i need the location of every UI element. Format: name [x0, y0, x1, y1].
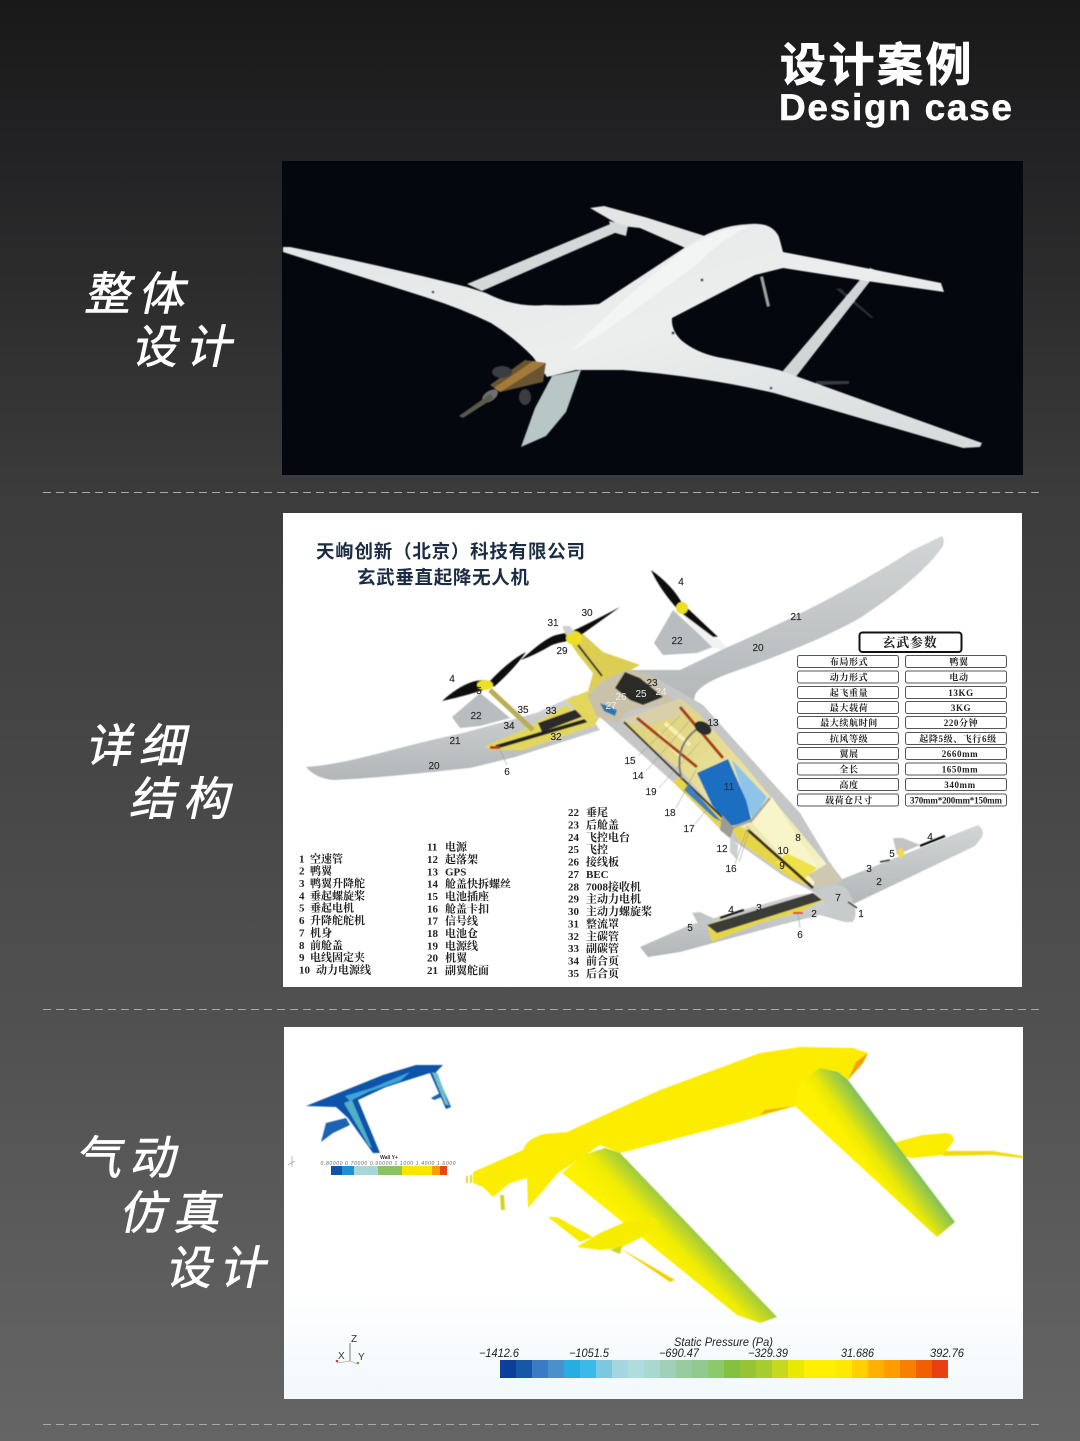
parts legend column 3: 23 — [568, 819, 580, 831]
pressure colour bar — [500, 1360, 948, 1378]
parts legend column 3: 32 — [568, 931, 580, 943]
right canard — [835, 825, 983, 908]
parts legend column 3: 飞控 — [586, 842, 608, 856]
parts legend column 1: 4 — [299, 890, 305, 902]
fuselage — [473, 1047, 868, 1208]
parts legend column 1: 8 — [299, 940, 305, 952]
parts legend column 3: 主动力螺旋桨 — [586, 904, 652, 918]
part number labels: 22 — [671, 636, 683, 647]
part number labels: 21 — [449, 736, 461, 747]
parameter table: 220分钟 — [944, 717, 978, 728]
illustration: cutaway drone — [306, 536, 983, 957]
heading: 整体设计: 设计 — [129, 321, 248, 373]
parameter table: 布局形式 — [830, 656, 868, 667]
parts legend column 2: 15 — [427, 891, 438, 903]
parts legend column 1: 6 — [299, 915, 305, 927]
parts legend column 2: 副翼舵面 — [445, 963, 489, 977]
divider — [43, 1008, 1040, 1010]
parts legend column 2: 11 — [427, 842, 437, 854]
parameter table: 起降5级、飞行6级 — [919, 733, 997, 744]
part number labels — [428, 577, 933, 941]
leader lines — [500, 716, 800, 928]
axes triad: X — [338, 1351, 345, 1362]
parts legend column 1: 3 — [299, 878, 305, 890]
parts legend column 1: 垂起螺旋桨 — [310, 888, 365, 902]
parts legend column 2: 18 — [427, 928, 438, 940]
parts legend column 2: 14 — [427, 879, 438, 891]
rudders — [452, 610, 731, 728]
part number labels: 21 — [790, 612, 802, 623]
colour bar labels: −1051.5 — [569, 1348, 610, 1360]
part number labels: 5 — [889, 849, 895, 860]
colour bar labels — [479, 1337, 965, 1360]
part number labels: 16 — [725, 864, 737, 875]
parameter table: 抗风等级 — [830, 733, 868, 744]
part number labels: 20 — [428, 761, 440, 772]
parts legend column 3: 26 — [568, 856, 580, 868]
heading: 气动仿真设计: 设计 — [163, 1242, 282, 1294]
part number labels: 11 — [724, 782, 735, 793]
company heading — [316, 541, 585, 588]
colour bar labels: 31.686 — [841, 1348, 875, 1360]
parameter table: 载荷仓尺寸 — [825, 794, 873, 806]
part number labels: 4 — [927, 832, 933, 843]
landing gear — [730, 837, 738, 860]
colour bar labels: 392.76 — [930, 1348, 965, 1360]
battery — [684, 759, 770, 838]
part number labels: 4 — [728, 905, 734, 916]
part number labels: 2 — [811, 909, 817, 920]
parts legend column 2: 舱盖卡扣 — [445, 901, 489, 915]
heading: 整体设计: 整体 — [82, 268, 201, 320]
parts legend column 3: 22 — [568, 807, 580, 819]
parts legend column 3: 接线板 — [586, 854, 619, 868]
parts legend column 2: 起落架 — [445, 852, 478, 866]
part number labels: 19 — [645, 787, 657, 798]
parts legend column 2: 电源 — [445, 840, 468, 854]
part number labels: 23 — [646, 678, 658, 689]
parts legend column 1: 9 — [299, 952, 305, 964]
parts legend column 2: 信号线 — [445, 914, 478, 928]
parameter table: 370mm*200mm*150mm — [910, 796, 1002, 806]
illustration: white drone — [283, 206, 982, 448]
parts legend column 1: 电线固定夹 — [310, 950, 365, 964]
part number labels: 20 — [752, 643, 764, 654]
panel: overall design photo — [282, 161, 1023, 475]
part number labels: 14 — [632, 771, 644, 782]
parameter table: 340mm — [944, 780, 976, 790]
part number labels: 2 — [876, 877, 882, 888]
part number labels: 10 — [777, 846, 789, 857]
colour bar labels: −1412.6 — [479, 1348, 520, 1360]
divider — [43, 1424, 1040, 1426]
parts legend column 2: 17 — [427, 916, 438, 928]
parts legend column 2: 20 — [427, 953, 438, 965]
parts legend column 2: 舱盖快拆螺丝 — [445, 877, 511, 891]
parameter table: 1650mm — [942, 764, 978, 774]
battery bay stripes — [657, 723, 690, 757]
parameter table: 高度 — [839, 779, 859, 790]
part number labels: 33 — [545, 706, 557, 717]
part number labels: 8 — [795, 833, 801, 844]
parts legend column 2: 12 — [427, 854, 438, 866]
tail cone — [566, 634, 640, 695]
inset axes — [288, 1156, 295, 1167]
part number labels: 18 — [664, 808, 676, 819]
parts legend column 3: 34 — [568, 956, 580, 968]
wing: right — [795, 1068, 955, 1237]
axes triad — [336, 1334, 365, 1364]
heading: 详细结构 — [83, 720, 246, 825]
part number labels: 3 — [756, 903, 762, 914]
parts legend column 1: 前舱盖 — [310, 938, 343, 952]
part number labels: 35 — [517, 705, 529, 716]
part number labels: 4 — [678, 577, 684, 588]
left boom fin — [548, 1217, 675, 1282]
divider — [43, 492, 1040, 494]
part number labels: 25 — [635, 689, 647, 700]
avionics bay — [587, 670, 677, 723]
panel: detailed structure — [283, 513, 1022, 987]
parameter table: 起飞重量 — [830, 687, 868, 698]
parts legend column 3: 飞控电台 — [586, 830, 631, 844]
parts legend column 1: 10 — [299, 964, 310, 976]
parts legend column 3: 28 — [568, 881, 580, 893]
parts legend column 1: 7 — [299, 927, 305, 939]
heading: 详细结构: 详细 — [83, 720, 202, 772]
parts legend column 3: 整流罩 — [586, 916, 619, 930]
parameter table — [798, 632, 1006, 806]
colour bar labels: −329.39 — [748, 1348, 789, 1360]
parameter table: 最大载荷 — [830, 702, 868, 713]
parts legend column 2 — [427, 840, 511, 977]
parts legend column 1: 升降舵舵机 — [310, 913, 365, 927]
parameter table: 动力形式 — [830, 672, 868, 682]
parts legend column 3: 后合页 — [586, 966, 619, 980]
parts legend column 2: 电池插座 — [445, 889, 490, 903]
axes triad: Y — [358, 1352, 365, 1363]
parts legend column 1 — [299, 851, 371, 976]
parts legend column 2: GPS — [445, 866, 466, 878]
part number labels: 9 — [779, 861, 785, 872]
part number labels: 29 — [556, 646, 568, 657]
main wing — [306, 536, 944, 780]
title: Design case — [779, 87, 1012, 128]
parts legend column 3 — [568, 805, 652, 980]
parts legend column 1: 5 — [299, 903, 305, 915]
parts legend column 1: 2 — [299, 866, 305, 878]
parts legend column 3: 后舱盖 — [586, 817, 619, 831]
parts legend column 3: 35 — [568, 968, 580, 980]
part number labels: 13 — [707, 718, 719, 729]
illustration: pressure contour drone — [466, 1047, 1023, 1323]
parts legend column 2: 13 — [427, 866, 438, 878]
parts legend column 2: 19 — [427, 940, 438, 952]
red elevator servo — [793, 912, 803, 914]
panel: aerodynamic simulation — [284, 1027, 1023, 1399]
parameter table: 3KG — [951, 703, 971, 713]
parts legend column 3: 27 — [568, 869, 580, 881]
propellers — [442, 570, 718, 701]
parameter table: 玄武参数 — [882, 635, 938, 651]
parameter table: 13KG — [948, 688, 974, 698]
title — [779, 39, 1012, 128]
part number labels: 17 — [683, 824, 695, 835]
inset: wall y+ drone — [306, 1065, 451, 1153]
fuselage — [600, 670, 843, 905]
parts legend column 2: 电池仓 — [445, 926, 478, 940]
motors — [477, 602, 688, 690]
parameter table: 最大续航时间 — [820, 717, 878, 728]
heading: 气动仿真设计: 气动 — [73, 1132, 192, 1184]
colour bar labels: −690.47 — [659, 1348, 700, 1360]
part number labels: 34 — [503, 721, 515, 732]
parts legend column 2: 21 — [427, 965, 438, 977]
parts legend column 3: 主动力电机 — [586, 892, 641, 906]
part number labels: 1 — [858, 909, 864, 920]
GPS unit — [692, 718, 714, 738]
part number labels: 6 — [797, 930, 803, 941]
part number labels: 24 — [655, 687, 667, 698]
inset colour scale — [320, 1155, 456, 1175]
part number labels: 7 — [835, 893, 841, 904]
nose — [818, 885, 856, 922]
part number labels: 5 — [476, 686, 482, 697]
axes triad: Z — [351, 1334, 357, 1345]
part number labels: 6 — [504, 767, 510, 778]
parts legend column 3: 33 — [568, 943, 580, 955]
cables — [624, 707, 813, 888]
parameter table: 翼展 — [839, 749, 859, 759]
parts legend column 1: 鸭翼升降舵 — [310, 876, 365, 890]
parts legend column 1: 动力电源线 — [316, 962, 371, 976]
parts legend column 1: 1 — [299, 853, 304, 865]
parts legend column 3: 主碳管 — [586, 929, 619, 943]
parts legend column 3: 31 — [568, 918, 579, 930]
parameter table: 2660mm — [942, 749, 978, 759]
part number labels: 12 — [716, 844, 728, 855]
title: 设计案例 — [780, 39, 974, 91]
parts legend column 2: 机翼 — [445, 951, 468, 965]
canard arm — [577, 1217, 660, 1250]
part number labels: 5 — [687, 923, 693, 934]
part number labels: 22 — [470, 711, 482, 722]
parts legend column 1: 鸭翼 — [310, 864, 333, 878]
parts legend column 3: 垂尾 — [586, 805, 608, 819]
parts legend column 2: 电源线 — [445, 938, 478, 952]
heading: 气动仿真设计: 仿真 — [117, 1187, 236, 1239]
heading: 整体设计 — [82, 268, 248, 373]
wing: left — [562, 1148, 777, 1323]
parameter table: 全长 — [839, 764, 859, 774]
part number labels: 3 — [866, 864, 872, 875]
inset colour scale: Wall Y+ — [380, 1155, 398, 1161]
parts legend column 3: 7008接收机 — [586, 879, 641, 893]
right boom fin — [893, 1133, 1023, 1158]
parts legend column 2: 16 — [427, 903, 438, 915]
inset colour scale: 0.80000 0.70000 0.90000 1.1000 1.4000 1.6000 — [320, 1161, 456, 1167]
part number labels: 31 — [547, 618, 559, 629]
part number labels: 4 — [449, 674, 455, 685]
parts legend column 3: 25 — [568, 844, 580, 856]
part number labels: 26 — [615, 692, 627, 703]
parts legend column 3: 30 — [568, 906, 580, 918]
parameter table: 鸭翼 — [949, 656, 969, 667]
colour bar labels: Static Pressure (Pa) — [674, 1337, 773, 1349]
parts legend column 3: 前合页 — [586, 954, 619, 968]
parts legend column 1: 机身 — [310, 925, 332, 939]
left canard — [640, 893, 853, 957]
part number labels: 30 — [581, 608, 593, 619]
parts legend column 1: 垂起电机 — [310, 901, 354, 915]
part number labels: 15 — [624, 756, 636, 767]
parts legend column 3: BEC — [586, 869, 609, 881]
heading: 详细结构: 结构 — [127, 773, 246, 825]
parts legend column 1: 空速管 — [310, 851, 343, 865]
company heading: 天峋创新（北京）科技有限公司 — [316, 541, 585, 562]
left wing bay — [485, 705, 593, 750]
company heading: 玄武垂直起降无人机 — [357, 567, 529, 588]
part number labels: 32 — [550, 732, 562, 743]
heading: 气动仿真设计 — [73, 1132, 282, 1294]
part number labels: 27 — [605, 701, 617, 712]
parts legend column 3: 24 — [568, 832, 580, 844]
parts legend column 3: 副碳管 — [586, 941, 619, 955]
parts legend column 3: 29 — [568, 894, 580, 906]
parameter table: 电动 — [949, 672, 969, 682]
